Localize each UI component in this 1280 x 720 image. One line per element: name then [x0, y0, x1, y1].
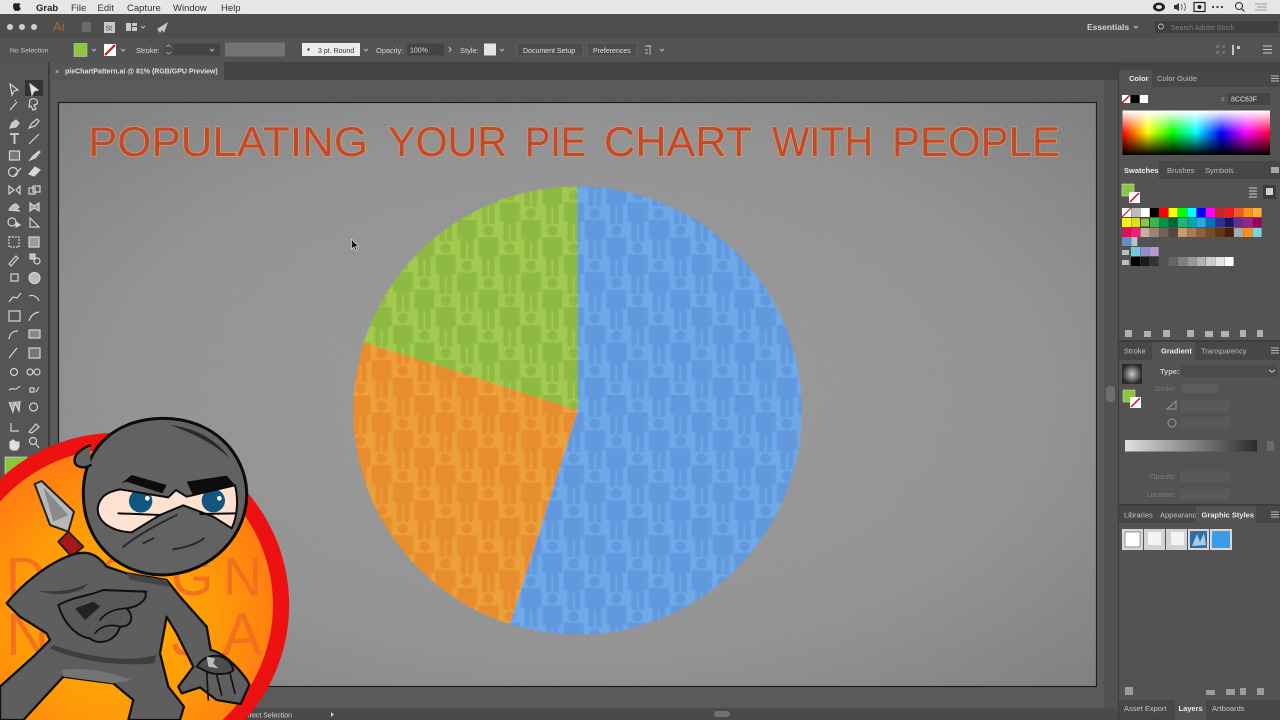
panel: gradient: Location: — [1147, 492, 1175, 499]
control bar: Opacity: — [376, 46, 404, 55]
panel: bottom tabs: Layers — [1178, 704, 1203, 713]
slice: blue — [510, 186, 802, 634]
panel: swatches — [1118, 161, 1280, 337]
stroke swatch — [104, 44, 116, 56]
application bar: St — [106, 26, 112, 32]
document setup button: Document Setup — [523, 48, 575, 55]
menu bar: Edit — [98, 3, 114, 14]
Ai logo: Ai — [53, 19, 65, 34]
menu bar: Capture — [127, 3, 161, 14]
panel: gradient: Transparency — [1201, 346, 1247, 356]
document tab row — [0, 62, 1118, 80]
panel: color: 8CC63F — [1231, 96, 1257, 104]
slice: green — [364, 186, 578, 410]
head — [83, 418, 247, 575]
panel: bottom tabs — [1118, 687, 1280, 720]
brush definition: 3 pt. Round — [318, 48, 354, 55]
panel: color: Color Guide — [1157, 74, 1197, 83]
panel: graphic styles — [1118, 506, 1280, 550]
badge text — [6, 547, 262, 668]
swatch panel footer icons — [1125, 330, 1263, 337]
eyelids and brows — [118, 475, 235, 515]
panel: bottom tabs: Asset Export — [1124, 704, 1167, 713]
control bar: Style: — [460, 46, 479, 55]
logo badge with ninja mascot — [0, 418, 289, 720]
panel: color — [1118, 70, 1280, 155]
status icons — [1153, 2, 1267, 12]
preferences button: Preferences — [593, 48, 631, 55]
control bar: Stroke: — [136, 46, 160, 55]
tools panel — [0, 62, 50, 712]
ninja mascot — [0, 418, 249, 720]
panel: gradient — [1118, 342, 1280, 500]
panel: swatches: Swatches — [1124, 166, 1159, 175]
title: PEOPLE — [892, 118, 1060, 165]
mouse cursor — [352, 239, 359, 251]
panel: bottom tabs: Artboards — [1212, 704, 1245, 713]
badge text: NINJA — [6, 601, 262, 668]
preferences button — [587, 43, 637, 56]
brush definition — [302, 43, 360, 56]
title: CHART — [604, 118, 752, 165]
panel: color: Color — [1129, 74, 1149, 83]
right control icons — [1216, 45, 1225, 54]
body shadows — [37, 573, 170, 683]
status bar — [50, 708, 1118, 720]
badge text: DESIGN — [6, 547, 262, 607]
title: PIE — [525, 118, 586, 165]
right panel dock — [1118, 62, 1280, 720]
face opening — [98, 485, 237, 532]
title: WITH — [772, 118, 873, 165]
title: YOUR — [388, 118, 507, 165]
menu bar: Grab — [36, 3, 58, 14]
badge: red ring and orange disc — [0, 433, 289, 720]
kunai handle — [58, 532, 83, 557]
fill color box — [5, 457, 27, 479]
right hand — [197, 656, 233, 674]
panel: swatches: Symbols — [1205, 166, 1234, 175]
panel: gradient: Type: — [1160, 367, 1179, 376]
panel: gradient: Gradient — [1161, 346, 1192, 356]
panel: swatches: Brushes — [1167, 166, 1195, 175]
application bar — [0, 14, 1280, 38]
status bar: Direct Selection — [243, 712, 292, 720]
title — [88, 118, 1060, 165]
right eye — [202, 489, 225, 512]
kunai blade — [35, 481, 74, 532]
color spectrum — [1122, 110, 1270, 155]
menu bar: Window — [173, 3, 207, 14]
face outline — [98, 485, 237, 532]
style thumbnails — [1122, 529, 1232, 550]
vertical scrollbar — [1097, 80, 1118, 708]
fill swatch — [74, 44, 87, 56]
panel: gradient: Stroke: — [1154, 386, 1176, 393]
mask folds — [123, 515, 204, 549]
menu bar: File — [71, 3, 86, 14]
fist — [58, 590, 146, 642]
application bar: Essentials — [1087, 22, 1129, 32]
menu bar: Help — [221, 3, 241, 14]
panel: color: # — [1221, 96, 1225, 104]
pie chart — [353, 186, 802, 634]
gradient slider — [1125, 440, 1257, 452]
document tab row: pieChartPattern.ai @ 81% (RGB/GPU Preview) — [65, 68, 218, 76]
panel: graphic styles: Graphic Styles — [1202, 510, 1254, 520]
control bar: 100% — [410, 48, 428, 54]
control bar — [0, 38, 1280, 62]
title: POPULATING — [88, 118, 368, 165]
search box: Search Adobe Stock — [1171, 25, 1235, 32]
document setup button — [517, 43, 583, 56]
head knot — [74, 445, 91, 467]
panel: gradient: Opacity: — [1150, 474, 1176, 481]
search box — [1155, 21, 1278, 33]
left eye — [129, 492, 152, 513]
slice: orange — [353, 342, 578, 624]
apple icon — [13, 3, 21, 11]
control bar: No Selection — [10, 48, 49, 54]
document tab row: × — [55, 69, 59, 76]
panel: gradient: Stroke — [1124, 346, 1146, 356]
body — [0, 553, 249, 720]
menu bar — [0, 0, 1280, 14]
swatch grid — [1122, 208, 1262, 266]
panel: graphic styles: Libraries — [1124, 510, 1153, 520]
panel: graphic styles: Appearanc — [1160, 510, 1197, 520]
artboard — [58, 102, 1096, 686]
